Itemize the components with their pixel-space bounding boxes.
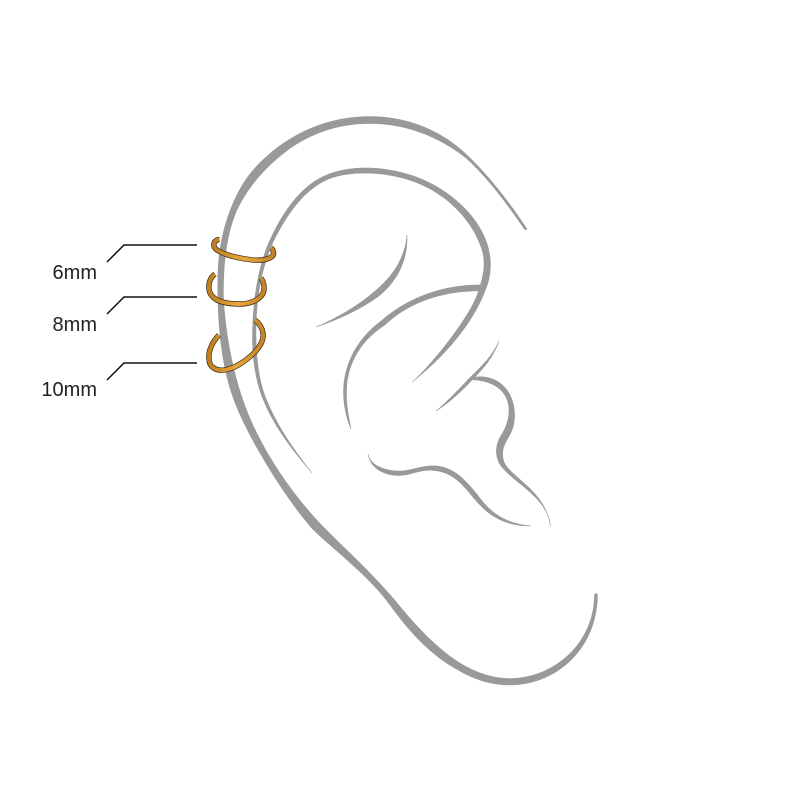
label: 10mm: [41, 363, 197, 401]
label: 10mm: 10mm: [41, 379, 97, 401]
label: 8mm: [53, 297, 197, 336]
label: 6mm: 6mm: [53, 262, 97, 284]
inner helix fold: [252, 168, 490, 473]
tragus line: [436, 341, 499, 411]
gold rings: [209, 240, 274, 370]
lower concha curve: [368, 454, 531, 526]
label: 8mm: 8mm: [53, 314, 97, 336]
upper fossa curve: [316, 235, 407, 327]
antihelix curve: [343, 285, 484, 429]
outer ear contour: [218, 116, 597, 685]
concha curve: [467, 377, 550, 526]
ring: 10mm: [209, 320, 263, 370]
ring: 8mm: [209, 274, 264, 304]
ear illustration: [218, 116, 597, 685]
ring: 6mm: [214, 240, 274, 260]
size labels: [41, 245, 197, 401]
label: 6mm: [53, 245, 197, 284]
